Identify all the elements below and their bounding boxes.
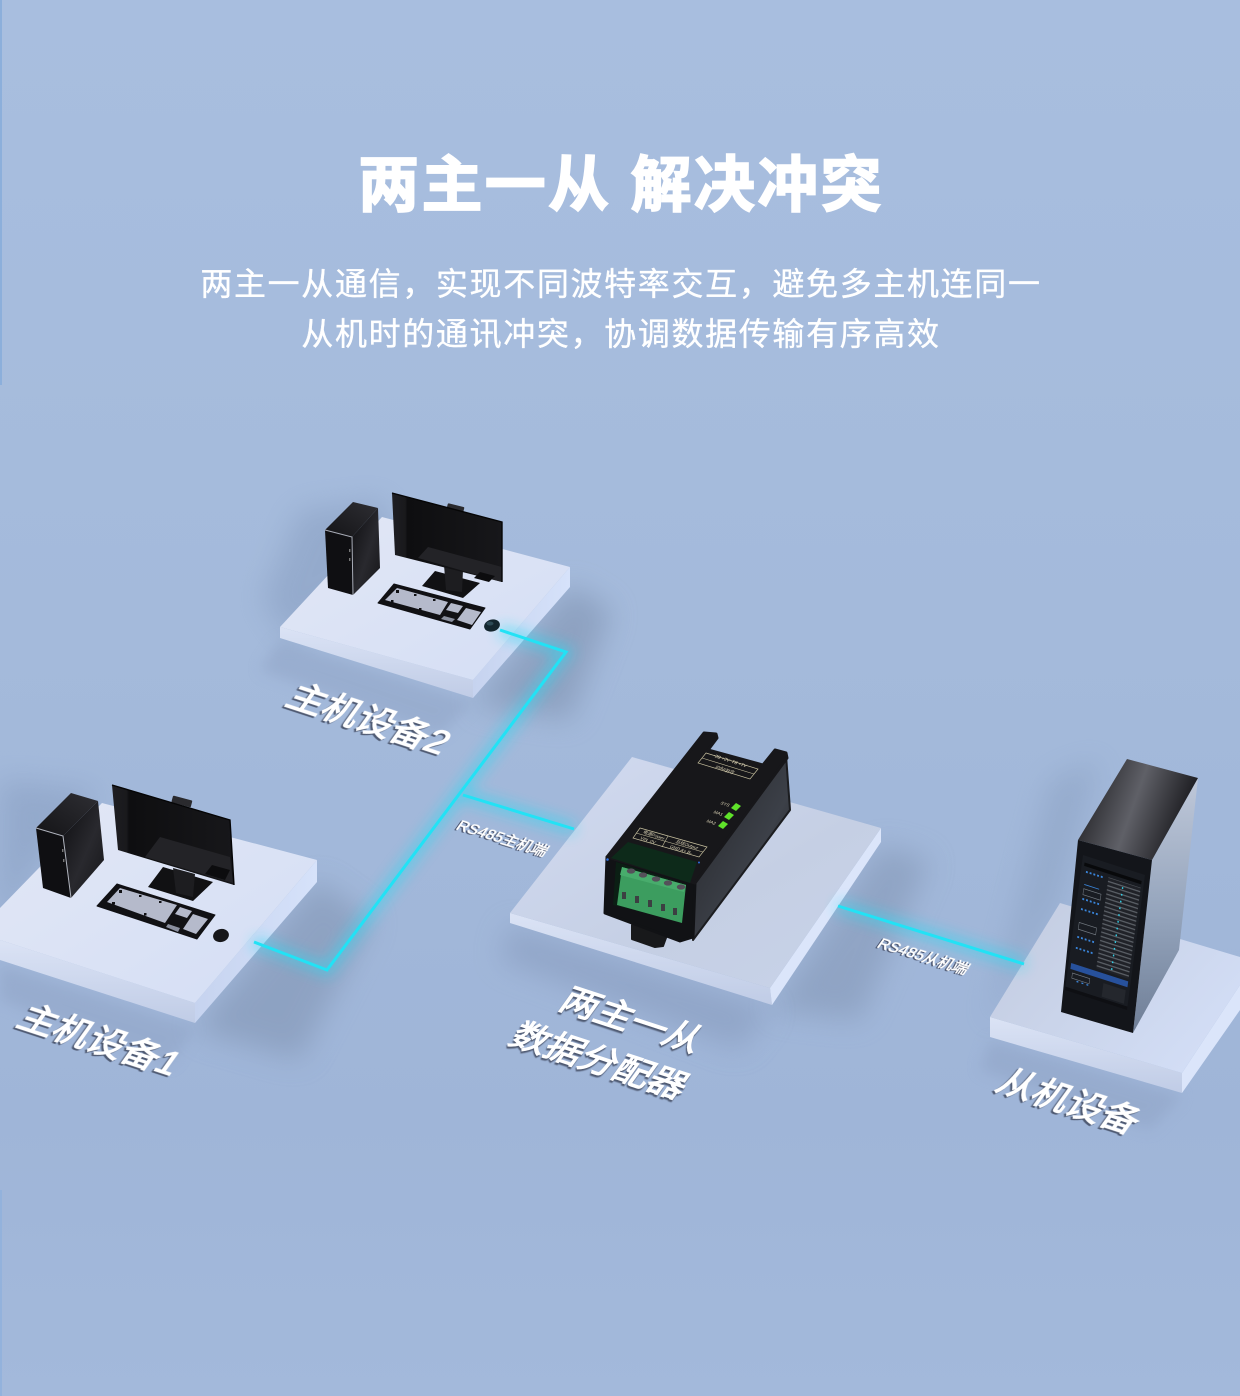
right side face	[693, 755, 790, 940]
subtitle	[200, 266, 1042, 352]
server rack: slave device	[1061, 759, 1198, 1033]
floor shadows	[0, 500, 1182, 1130]
title: 两主一从 解决冲突	[358, 151, 884, 219]
label: host device 1: 主机设备1	[10, 998, 190, 1082]
status LEDs	[705, 801, 741, 829]
platform: distributor	[510, 757, 881, 1005]
cyan connection lines	[254, 630, 1024, 970]
top panel	[1078, 759, 1198, 860]
label: distributor: 数据分配器	[502, 1016, 697, 1105]
subtitle: 两主一从通信，实现不同波特率交互，避免多主机连同一	[200, 266, 1042, 302]
label: RS485 slave side: RS485从机端	[874, 936, 973, 977]
silkscreen: power and output: 总线Output	[675, 838, 701, 851]
label: distributor	[502, 981, 713, 1105]
subtitle: 从机时的通讯冲突，协调数据传输有序高效	[301, 316, 941, 352]
opening	[611, 842, 697, 883]
label: host device 2: 主机设备2	[279, 677, 459, 761]
tower PC	[325, 502, 380, 595]
top face	[607, 733, 787, 883]
tower PC	[36, 793, 104, 898]
status LEDs: MA2	[705, 819, 718, 826]
monitor stand	[148, 867, 213, 901]
label: slave device: 从机设备	[989, 1062, 1150, 1140]
silkscreen: power and output	[633, 828, 707, 857]
green terminal block	[617, 867, 686, 923]
label: distributor: 两主一从	[552, 981, 713, 1059]
computer: host device 2	[325, 493, 502, 633]
rack contents	[1065, 855, 1145, 1010]
silkscreen: power and output: 电源Power	[641, 829, 667, 842]
monitor	[392, 493, 502, 582]
silkscreen: input: 总线Input	[713, 764, 736, 776]
platform: host device 2	[280, 517, 570, 698]
blue corner dots	[606, 858, 700, 864]
monitor	[112, 785, 234, 885]
adapter: two-master one-slave distributor	[605, 733, 790, 947]
monitor stand	[422, 565, 480, 598]
computer: host device 1	[36, 785, 234, 944]
status LEDs: MA1	[712, 810, 725, 817]
silkscreen: power and output: VIN 0V	[639, 836, 658, 845]
status LEDs: SYS	[719, 801, 731, 808]
keyboard	[378, 584, 485, 629]
mouse	[212, 927, 230, 944]
platform: host device 1	[0, 803, 317, 1023]
keyboard	[97, 884, 215, 939]
silkscreen: power and output: GND A+ B-	[669, 844, 694, 855]
front face	[605, 857, 695, 941]
silkscreen: input: A1+ B1- A2+ B2-	[712, 753, 748, 768]
side panel	[1133, 778, 1198, 1033]
platform: slave device	[990, 903, 1240, 1093]
mounting clip	[632, 925, 667, 947]
label: RS485 master side: RS485主机端	[453, 818, 552, 859]
silkscreen: input	[698, 753, 758, 779]
mouse	[483, 618, 501, 633]
front panel	[1061, 840, 1152, 1033]
